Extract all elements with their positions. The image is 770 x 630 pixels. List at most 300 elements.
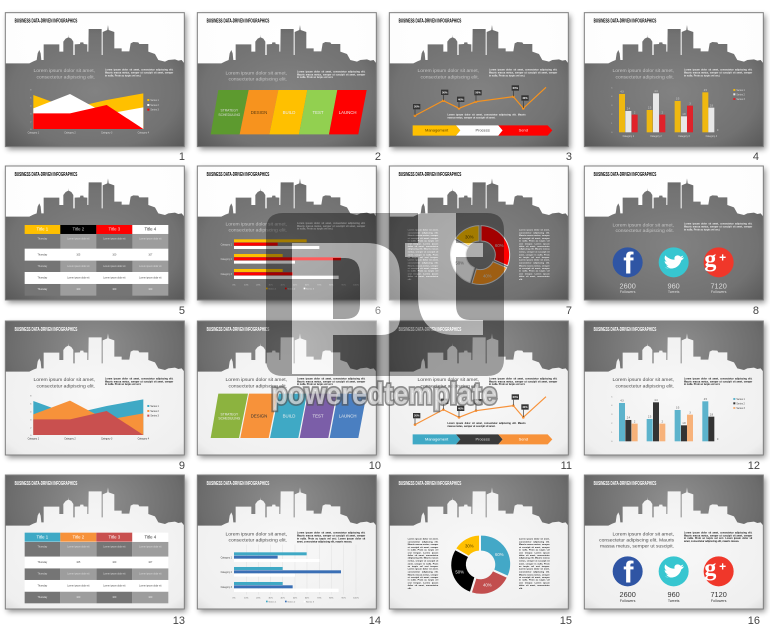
- line chart: [413, 85, 546, 117]
- slide numbers: 14: [369, 615, 381, 627]
- legend: Series 2: [150, 410, 160, 413]
- table: Lorem ipsum dolor sit: [103, 546, 126, 549]
- slide 10: process parallelograms, light: [197, 321, 378, 458]
- left text column: Lorem ipsum dolor sit amet, consectetur adipiscing elit. Mauris massa metus, semper ut suscipit sit amet, semper in nulla. Proin ac turpis vel orci tempor. Lorem ipsum dolor sit amet, consectetur adipiscing elit. Mauris massa metus, semper ut suscipit sit amet, semper in nulla. Proin ac turpis vel orci tempor. Lorem ipsum dolor sit amet, consectetur adipiscing elit. Mauris massa metus, semper ut suscipit sit amet, semper in nulla. Proin ac turpis vel orci tempor. Lorem ipsum dolor sit amet, consectetur elit.: [408, 538, 438, 590]
- heading: Lorem ipsum dolor sit amet,: [225, 221, 287, 227]
- area chart: 0: [30, 435, 32, 437]
- arrow banner: Management: [425, 128, 449, 133]
- process steps: STRATEGY: [220, 109, 239, 113]
- legend: Series 1: [736, 398, 746, 401]
- heading: consectetur adipiscing elit.: [616, 383, 674, 389]
- process steps: TEST: [312, 110, 324, 115]
- slide numbers: [173, 151, 760, 627]
- title: BUSINESS DATA-DRIVEN INFOGRAPHICS: [594, 19, 656, 25]
- follower stats: Tweets: [668, 290, 680, 294]
- table: Lorem ipsum dolor sit: [67, 277, 90, 280]
- slide 12: bar chart, light: [584, 321, 765, 458]
- follower stats: 2600: [620, 590, 636, 599]
- area chart: 2: [30, 427, 31, 429]
- donut chart: 40%: [483, 582, 492, 587]
- bar chart: 4: [611, 405, 613, 407]
- table: Thursday: [37, 277, 48, 280]
- area chart: 6: [30, 403, 32, 405]
- table: Lorem ipsum dolor sit: [67, 573, 90, 576]
- table: Title 1: [37, 534, 49, 539]
- slide 14: horizontal bars, light: [197, 475, 378, 612]
- bar chart: 2.4: [627, 109, 631, 111]
- heading: consectetur adipiscing elit.: [37, 383, 95, 389]
- heading: Lorem ipsum dolor sit amet,: [417, 377, 479, 383]
- legend: Series 3: [150, 415, 160, 418]
- bar chart: 5: [611, 396, 613, 398]
- table: Lorem ipsum dolor sit: [139, 238, 162, 241]
- skyline: [197, 178, 376, 300]
- slide numbers: 3: [566, 151, 572, 163]
- icon: google plus: g: [704, 247, 716, 273]
- line chart: 60%: [513, 86, 519, 90]
- follower stats: Followers: [620, 290, 636, 294]
- horizontal bar chart: 60%: [305, 598, 309, 600]
- legend: [266, 600, 315, 603]
- line chart: 50%: [475, 91, 481, 95]
- follower stats: [620, 590, 727, 603]
- legend: Series 3: [306, 600, 315, 603]
- title: BUSINESS DATA-DRIVEN INFOGRAPHICS: [15, 19, 77, 25]
- horizontal bar chart: 40%: [280, 598, 285, 600]
- legend: Series 3: [736, 407, 746, 410]
- slide numbers: 7: [566, 305, 572, 317]
- bar chart: 0: [717, 439, 719, 441]
- title: BUSINESS DATA-DRIVEN INFOGRAPHICS: [15, 172, 77, 178]
- line chart: 40%: [458, 97, 464, 101]
- horizontal bar chart: Category 1: [221, 243, 233, 246]
- table: 105: [76, 254, 81, 256]
- bar chart: 4.5: [704, 399, 708, 401]
- process steps: TEST: [312, 414, 324, 419]
- heading: consectetur adipiscing elit. Mauris: [599, 537, 674, 543]
- title: BUSINESS DATA-DRIVEN INFOGRAPHICS: [15, 481, 77, 487]
- table: 100: [112, 254, 117, 256]
- bar chart: 3: [689, 103, 691, 105]
- skyline: [5, 25, 184, 147]
- table: 100: [112, 597, 117, 599]
- heading: consectetur adipiscing elit.: [616, 228, 674, 234]
- donut chart: [451, 536, 510, 594]
- follower stats: 7120: [710, 281, 727, 290]
- icon: facebook: [613, 555, 643, 589]
- table: Title 4: [144, 534, 157, 539]
- donut chart: 30%: [465, 235, 474, 240]
- table: Lorem ipsum dolor sit: [139, 265, 162, 268]
- donut chart: [451, 226, 510, 284]
- area chart: Category 4: [138, 438, 150, 441]
- slide numbers: 4: [753, 151, 759, 163]
- heading: consectetur adipiscing elit.: [229, 77, 287, 83]
- bar chart: 4.4: [654, 91, 658, 93]
- table: Lorem ipsum dolor sit: [67, 546, 90, 549]
- line chart: 50%: [442, 90, 448, 94]
- horizontal bar chart: 50%: [293, 285, 297, 287]
- horizontal bar chart: [221, 239, 359, 287]
- table: 100: [76, 597, 81, 599]
- horizontal bar chart: 10%: [244, 598, 249, 600]
- horizontal bar chart: Category 2: [221, 571, 233, 574]
- table: Thursday: [37, 561, 48, 564]
- icon: facebook: f: [623, 246, 634, 280]
- legend: [147, 405, 160, 418]
- table: Lorem ipsum dolor sit: [139, 277, 162, 280]
- arrow banner: Send: [519, 128, 528, 133]
- process steps: SCHEDULING: [218, 113, 241, 117]
- title: BUSINESS DATA-DRIVEN INFOGRAPHICS: [207, 481, 269, 487]
- bar chart: 3: [689, 412, 691, 414]
- legend: Series 2: [287, 287, 296, 290]
- bar chart: 4.3: [620, 401, 624, 403]
- skyline: [197, 487, 376, 609]
- horizontal bar chart: 0%: [232, 285, 236, 287]
- process steps: STRATEGY: [220, 412, 239, 416]
- follower stats: 960: [668, 590, 680, 599]
- heading: Lorem ipsum dolor sit amet,: [225, 377, 287, 383]
- skyline: [389, 178, 568, 300]
- bar chart: 4.5: [704, 90, 708, 92]
- horizontal bar chart: 60%: [305, 285, 309, 287]
- bar chart: 3: [611, 414, 613, 416]
- heading: consectetur adipiscing elit.: [37, 74, 95, 80]
- slide numbers: 12: [748, 460, 760, 472]
- area chart: Category 4: [138, 132, 150, 135]
- area chart: Category 3: [101, 132, 113, 135]
- follower stats: 7120: [710, 590, 727, 599]
- bar chart: 4: [611, 96, 613, 98]
- follower stats: Followers: [711, 599, 727, 603]
- table: 100: [112, 562, 117, 564]
- area chart: [28, 395, 150, 441]
- slide 15: donut, light: [389, 475, 570, 612]
- heading: Lorem ipsum dolor sit amet,: [612, 222, 674, 228]
- title: BUSINESS DATA-DRIVEN INFOGRAPHICS: [207, 172, 269, 178]
- bar chart: 2: [611, 423, 612, 425]
- horizontal bar chart: 0%: [232, 598, 236, 600]
- donut chart: 60%: [495, 552, 504, 557]
- legend: Series 2: [736, 402, 746, 405]
- right text column: Lorem ipsum dolor sit amet, consectetur adipiscing elit. Mauris massa metus, semper ut suscipit sit amet, semper in nulla. Proin ac turpis vel orci tempor. Lorem ipsum dolor sit amet, consectetur adipiscing elit. Mauris massa metus, semper ut suscipit sit amet, semper in nulla. Proin ac turpis vel orci tempor. Lorem ipsum dolor sit amet, consectetur adipiscing elit. Mauris massa metus, semper ut suscipit sit amet, semper in nulla. Proin ac turpis vel orci tempor. Lorem ipsum dolor sit amet, consectetur elit.: [519, 538, 550, 590]
- bar chart: 1: [611, 123, 612, 125]
- bar chart: 2: [634, 421, 636, 423]
- horizontal bar chart: 90%: [341, 598, 346, 600]
- bar chart: 2.5: [648, 108, 652, 110]
- table: Lorem ipsum dolor sit: [103, 573, 126, 576]
- title: BUSINESS DATA-DRIVEN INFOGRAPHICS: [15, 327, 77, 333]
- process steps: LAUNCH: [339, 414, 357, 419]
- table: Thursday: [37, 573, 48, 576]
- table: Thursday: [37, 288, 48, 291]
- horizontal bar chart: 20%: [256, 598, 261, 600]
- table: 100: [76, 289, 81, 291]
- bar chart: 2.5: [648, 417, 652, 419]
- process steps: DESIGN: [251, 414, 267, 419]
- table: Lorem ipsum dolor sit: [67, 238, 90, 241]
- skyline: [5, 178, 184, 300]
- line chart: 20%: [414, 105, 420, 109]
- table: 100: [148, 289, 153, 291]
- follower stats: [620, 281, 727, 294]
- bar chart: [611, 396, 719, 443]
- legend: [147, 99, 160, 112]
- area chart: 8: [30, 89, 32, 91]
- slide numbers: 11: [561, 460, 572, 472]
- line chart: 40%: [458, 406, 464, 410]
- skyline: [197, 333, 376, 455]
- donut chart: 30%: [465, 544, 474, 549]
- bar chart: 1.8: [682, 114, 686, 116]
- donut chart: 40%: [483, 273, 492, 278]
- line chart: 50%: [442, 399, 448, 403]
- slide 2: process parallelograms, dark: [197, 13, 378, 149]
- table: Lorem ipsum dolor sit: [103, 238, 126, 241]
- table: Thursday: [37, 546, 48, 549]
- slide 8: social media, dark: [584, 166, 765, 303]
- table: [25, 225, 168, 296]
- table: Lorem ipsum dolor sit: [139, 546, 162, 549]
- line chart: 60%: [513, 395, 519, 399]
- bar chart: 2.8: [710, 414, 714, 416]
- bar chart: 3.5: [676, 408, 680, 410]
- heading: Lorem ipsum dolor sit amet,: [417, 68, 479, 74]
- line chart: 40%: [522, 405, 528, 409]
- slide numbers: 13: [173, 615, 185, 627]
- line chart: 50%: [475, 400, 481, 404]
- line chart: 40%: [522, 96, 528, 100]
- watermark logo: [266, 213, 504, 411]
- legend: Series 2: [736, 93, 746, 96]
- skyline: [584, 178, 763, 300]
- icon: google plus: +: [719, 251, 726, 265]
- follower stats: 960: [668, 281, 680, 290]
- horizontal bar chart: 30%: [268, 598, 273, 600]
- legend: Series 2: [287, 600, 296, 603]
- horizontal bar chart: 70%: [317, 598, 322, 600]
- area chart: 3: [30, 113, 32, 115]
- slide numbers: 15: [560, 615, 572, 627]
- bar chart: [611, 87, 719, 138]
- heading: consectetur adipiscing elit.: [421, 383, 479, 389]
- heading: Lorem ipsum dolor sit amet,: [33, 377, 95, 383]
- legend: Series 1: [150, 405, 160, 408]
- heading: Lorem ipsum dolor sit amet,: [33, 68, 95, 74]
- donut chart: 50%: [455, 570, 464, 575]
- heading: Lorem ipsum dolor sit amet,: [612, 377, 674, 383]
- area chart: 8: [30, 395, 32, 397]
- bar chart: 0: [717, 130, 719, 132]
- arrow banner: Process: [475, 437, 490, 442]
- slide 13: table, light: [5, 475, 186, 612]
- bar chart: 0: [611, 441, 613, 443]
- title: BUSINESS DATA-DRIVEN INFOGRAPHICS: [399, 172, 461, 178]
- area chart: [28, 89, 150, 135]
- horizontal bar chart: 80%: [329, 285, 334, 287]
- slide 5: table, dark: [5, 166, 186, 303]
- horizontal bar chart: 40%: [280, 285, 285, 287]
- process steps: SCHEDULING: [218, 417, 241, 421]
- bar chart: 0: [611, 132, 613, 134]
- slide numbers: 2: [375, 151, 381, 163]
- line chart: 20%: [414, 414, 420, 418]
- skyline: [389, 487, 568, 609]
- title: BUSINESS DATA-DRIVEN INFOGRAPHICS: [399, 19, 461, 25]
- arrow banner: Send: [519, 437, 528, 442]
- slide numbers: 8: [753, 305, 759, 317]
- title: BUSINESS DATA-DRIVEN INFOGRAPHICS: [207, 327, 269, 333]
- table: 100: [112, 289, 117, 291]
- heading: consectetur adipiscing elit.: [229, 228, 287, 234]
- area chart: 4: [30, 105, 32, 107]
- heading: Lorem ipsum dolor sit amet,: [225, 531, 287, 537]
- follower stats: 2600: [620, 281, 636, 290]
- follower stats: Followers: [620, 599, 636, 603]
- table: Thursday: [37, 238, 48, 241]
- title: BUSINESS DATA-DRIVEN INFOGRAPHICS: [399, 481, 461, 487]
- heading: Lorem ipsum dolor sit amet,: [225, 71, 287, 77]
- table: Lorem ipsum dolor sit: [67, 265, 90, 268]
- title: BUSINESS DATA-DRIVEN INFOGRAPHICS: [207, 19, 269, 25]
- bar chart: 5: [611, 87, 613, 89]
- legend: [733, 89, 746, 101]
- legend: Series 3: [736, 98, 746, 101]
- icon: facebook: [613, 246, 643, 280]
- slide 1: area chart, dark: [5, 13, 186, 149]
- heading: consectetur adipiscing elit.: [229, 537, 287, 543]
- area chart: Category 1: [28, 132, 40, 135]
- process steps: BUILD: [283, 414, 295, 419]
- table: Title 1: [37, 227, 49, 232]
- slide 11: line chart and arrows, light: [389, 321, 570, 458]
- process steps: BUILD: [283, 110, 295, 115]
- slide numbers: 10: [369, 460, 381, 472]
- legend: Series 1: [268, 600, 277, 603]
- bar chart: 1: [611, 432, 612, 434]
- donut chart: 50%: [455, 261, 464, 266]
- slide 9: area chart, light: [5, 321, 186, 458]
- slide 4: bar chart, dark: [584, 13, 765, 149]
- slide 16: social media, light: [584, 475, 765, 612]
- area chart: 3: [30, 419, 32, 421]
- slide numbers: 9: [179, 460, 185, 472]
- heading: massa metus, semper ut suscipit.: [600, 543, 674, 549]
- slide 7: donut, dark: [389, 166, 570, 303]
- slide 6: horizontal bars, dark: [197, 166, 378, 303]
- bar chart: 2: [662, 112, 664, 114]
- table: Lorem ipsum dolor sit: [103, 584, 126, 587]
- icon: google plus: [704, 556, 734, 586]
- table: 107: [148, 562, 153, 564]
- arrow banner: [413, 434, 552, 444]
- paragraph: Lorem ipsum dolor sit amet, consectetur adipiscing elit. Mauris massa metus, semper ut suscipit sit amet, semper in nulla. Proin ac turpis vel orci. Lorem ipsum dolor sit amet, consectetur adipiscing elit, mauris massa.: [297, 532, 365, 543]
- watermark wordmark: poweredtemplate: [271, 376, 497, 411]
- bar chart: 2: [634, 112, 636, 114]
- slide numbers: 1: [179, 151, 185, 163]
- legend: Series 2: [150, 104, 160, 107]
- table: Thursday: [37, 596, 48, 599]
- skyline: [389, 25, 568, 147]
- heading: Lorem ipsum dolor sit amet,: [612, 531, 674, 537]
- skyline: [197, 25, 376, 147]
- arrow banner: [413, 125, 552, 136]
- horizontal bar chart: Category 1: [221, 556, 233, 559]
- icon: twitter: [659, 247, 689, 277]
- horizontal bar chart: 100%: [353, 598, 359, 600]
- process steps: LAUNCH: [339, 110, 357, 115]
- bar chart: 2: [662, 421, 664, 423]
- bar chart: 3: [611, 105, 613, 107]
- horizontal bar chart: [221, 545, 359, 600]
- icon: google plus: [704, 247, 734, 277]
- icon: twitter: [659, 556, 689, 586]
- table: Title 3: [109, 534, 121, 539]
- table: Lorem ipsum dolor sit: [139, 584, 162, 587]
- donut chart: 60%: [495, 243, 504, 248]
- table: Lorem ipsum dolor sit: [103, 265, 126, 268]
- bar chart: 2: [611, 114, 612, 116]
- heading: Lorem ipsum dolor sit amet,: [612, 68, 674, 74]
- title: BUSINESS DATA-DRIVEN INFOGRAPHICS: [399, 327, 461, 333]
- table: Title 4: [144, 227, 157, 232]
- heading: consectetur adipiscing elit.: [421, 74, 479, 80]
- paragraph: Lorem ipsum dolor sit amet, consectetur adipiscing elit. Mauris massa metus, semper ut suscipit sit amet, semper in nulla. Proin ac turpis vel orci. Lorem ipsum dolor sit amet, consectetur adipiscing elit, mauris massa.: [684, 531, 752, 542]
- table: 107: [148, 254, 153, 256]
- skyline: [584, 333, 763, 455]
- slide numbers: 6: [375, 305, 381, 317]
- process steps: DESIGN: [251, 110, 267, 115]
- bar chart: Category 4: [706, 135, 718, 138]
- follower stats: Tweets: [668, 599, 680, 603]
- left text column: Lorem ipsum dolor sit amet, consectetur adipiscing elit. Mauris massa metus, semper ut suscipit sit amet, semper in nulla. Proin ac turpis vel orci tempor. Lorem ipsum dolor sit amet, consectetur adipiscing elit. Mauris massa metus, semper ut suscipit sit amet, semper in nulla. Proin ac turpis vel orci tempor. Lorem ipsum dolor sit amet, consectetur adipiscing elit. Mauris massa metus, semper ut suscipit sit amet, semper in nulla. Proin ac turpis vel orci tempor. Lorem ipsum dolor sit amet, consectetur elit.: [408, 229, 438, 281]
- horizontal bar chart: 90%: [341, 285, 346, 287]
- horizontal bar chart: 10%: [244, 285, 249, 287]
- table: Lorem ipsum dolor sit: [103, 277, 126, 280]
- heading: consectetur adipiscing elit.: [616, 74, 674, 80]
- area chart: Category 2: [64, 438, 76, 441]
- horizontal bar chart: 20%: [256, 285, 261, 287]
- horizontal bar chart: Category 3: [221, 273, 233, 276]
- slide 3: line chart and arrows, dark: [389, 13, 570, 149]
- heading: consectetur adipiscing elit.: [229, 383, 287, 389]
- legend: Series 1: [150, 99, 160, 102]
- table: 105: [76, 562, 81, 564]
- process steps: [211, 90, 367, 134]
- skyline: [584, 487, 763, 609]
- legend: [733, 398, 746, 410]
- table: Lorem ipsum dolor sit: [67, 584, 90, 587]
- area chart: 6: [30, 97, 32, 99]
- bar chart: 2.4: [627, 418, 631, 420]
- area chart: Category 3: [101, 438, 113, 441]
- bar chart: Category 1: [623, 135, 635, 138]
- follower stats: Followers: [711, 290, 727, 294]
- bar chart: 4.3: [620, 92, 624, 94]
- arrow banner: Process: [475, 128, 490, 133]
- title: BUSINESS DATA-DRIVEN INFOGRAPHICS: [594, 172, 656, 178]
- table: Title 2: [73, 534, 85, 539]
- table: Title 2: [73, 227, 85, 232]
- bar chart: 4.4: [654, 400, 658, 402]
- horizontal bar chart: 80%: [329, 598, 334, 600]
- table: Thursday: [37, 265, 48, 268]
- skyline: [389, 333, 568, 455]
- bar chart: 1.8: [682, 423, 686, 425]
- legend: Series 1: [736, 89, 746, 92]
- slide numbers: 16: [748, 615, 760, 627]
